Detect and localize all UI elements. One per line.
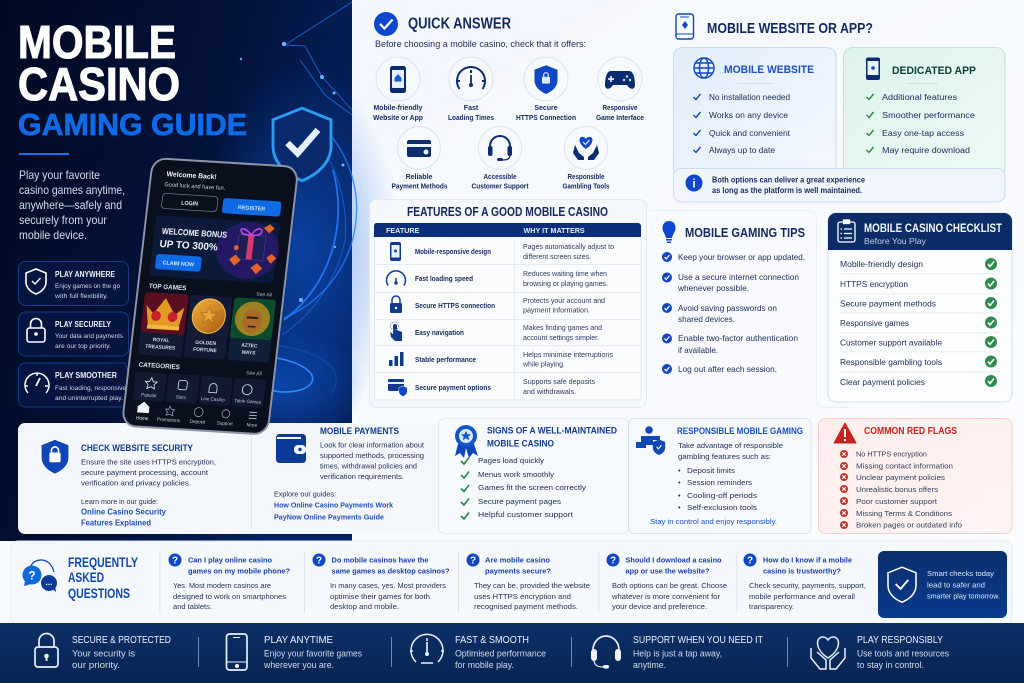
responsible copy: •	[678, 466, 681, 475]
faq: payments secure: Are mobile casino	[485, 556, 550, 564]
card: dedicated app: Additional features	[882, 93, 957, 102]
footer: play anytime: PLAY ANYTIME	[264, 634, 333, 646]
faq: can i play: and tablets.	[173, 604, 212, 611]
payments copy	[274, 440, 424, 498]
responsible copy: Cooling-off periods	[687, 491, 757, 500]
item: responsive game interface: Responsive	[602, 105, 638, 112]
footer: secure and protected	[35, 634, 171, 670]
phone welcome banner	[149, 215, 282, 284]
row: mobile-responsive: Mobile-responsive design	[415, 247, 491, 256]
payments links: PayNow Online Payments Guide	[274, 512, 384, 522]
card: mobile website: No installation needed	[709, 93, 790, 102]
responsible copy: Session reminders	[687, 478, 752, 487]
icon: clipboard	[838, 220, 855, 242]
row: stable performance: Helps minimise interruptions	[523, 350, 613, 359]
phone categories: Table Games	[234, 398, 262, 405]
accent rule	[19, 153, 69, 155]
tip text: Enable two-factor authentication	[678, 334, 798, 343]
card: mobile website	[674, 48, 836, 178]
faq: trustworthy: transparency.	[749, 604, 794, 611]
phone greeting: Welcome Back!	[166, 171, 217, 181]
game: aztec ways: WAYS	[241, 350, 256, 357]
row: mobile-responsive: Pages automatically adjust to	[523, 242, 614, 251]
feature card: play securely: are our top priority.	[55, 343, 111, 350]
table header: FEATURE	[386, 226, 420, 235]
checklist header	[828, 213, 1012, 250]
feature card: play securely: Your data and payments	[55, 333, 124, 340]
icon: chat bubbles: ...	[46, 578, 52, 587]
responsible copy: Take advantage of responsible	[678, 441, 783, 450]
icon: person with shield	[636, 426, 665, 455]
faq: can i play: games on my mobile phone?	[188, 566, 290, 576]
tip text: Avoid saving passwords on	[678, 304, 777, 313]
card: dedicated app: Smoother performance	[882, 111, 976, 120]
signs list: Secure payment pages	[478, 497, 561, 506]
intro text: mobile device.	[19, 228, 87, 242]
security copy: secure payment processing, account	[81, 468, 208, 477]
icon: medal	[455, 425, 478, 458]
callout: smart checks: lead to safer and	[927, 580, 985, 590]
feature card: play securely: PLAY SECURELY	[55, 320, 112, 329]
panel: signs of a well-maintained mobile casino	[438, 418, 628, 534]
item: reliable payment methods: Payment Methods	[392, 184, 448, 190]
tip text: shared devices.	[678, 315, 735, 324]
footer: fast and smooth: for mobile play.	[455, 660, 514, 670]
heading: features: FEATURES OF A GOOD MOBILE CASINO	[407, 205, 608, 219]
red flag list: Broken pages or outdated info	[856, 520, 962, 530]
security copy	[81, 458, 216, 506]
responsible copy: •	[678, 503, 681, 512]
phone register button: REGISTER	[238, 205, 266, 213]
panel: responsible mobile gaming	[628, 418, 811, 534]
faq: download	[606, 554, 727, 611]
icon: hero shield	[273, 108, 331, 181]
security copy: Ensure the site uses HTTPS encryption,	[81, 458, 216, 466]
faq: same games: In many cases, yes. Most providers	[330, 583, 447, 590]
faq: can i play	[168, 554, 290, 611]
item: responsible gambling tools: Responsible	[568, 174, 605, 181]
faq: can i play: Can I play online casino	[188, 556, 272, 564]
responsible copy: Deposit limits	[687, 466, 735, 475]
footer: play anytime: wherever you are.	[263, 660, 334, 670]
quick answer intro: Before choosing a mobile casino, check that it offers:	[375, 39, 586, 49]
phone bottom navigation: More	[246, 422, 258, 428]
faq: payments secure: They can be, provided the website	[474, 583, 590, 590]
tip text: Use a secure internet connection	[678, 273, 799, 282]
row: easy navigation	[390, 322, 602, 342]
panel: quick answer	[373, 12, 644, 190]
card: mobile website: Always up to date	[709, 146, 776, 155]
card: dedicated app	[844, 48, 1005, 178]
phone register button	[222, 198, 282, 217]
red flag list: Missing Terms & Conditions	[856, 509, 952, 518]
tip text: if available.	[678, 346, 718, 355]
payments links	[274, 500, 394, 522]
callout: smart checks: smarter play tomorrow.	[927, 592, 1000, 600]
panel: common red flags	[818, 418, 1012, 534]
checklist items: Mobile-friendly design	[840, 260, 923, 269]
responsible copy: Self-exclusion tools	[687, 503, 757, 512]
signs list: Helpful customer support	[478, 510, 574, 519]
checklist items: Customer support available	[840, 338, 943, 348]
faq: download: Both options can be great. Choose	[612, 583, 727, 590]
phone categories	[133, 361, 267, 408]
row: mobile-responsive: different screen sizes.	[523, 252, 591, 261]
item: fast loading: Loading Times	[448, 115, 494, 122]
panel: check website security and mobile payments	[18, 423, 440, 534]
note: both options: Both options can deliver a great experience	[712, 176, 866, 184]
table	[374, 223, 641, 400]
phone bottom navigation: Support	[216, 420, 234, 426]
phone bottom navigation: Promotions	[157, 417, 181, 423]
closing line: Stay in control and enjoy responsibly.	[650, 517, 777, 526]
icon: check badge	[374, 12, 398, 36]
phone bottom navigation: Deposit	[190, 419, 206, 425]
footer: support: anytime.	[633, 660, 666, 670]
heading: mobile payments: MOBILE PAYMENTS	[320, 426, 399, 437]
row: easy navigation: Easy navigation	[415, 328, 464, 337]
note: both options: as long as the platform is well maintained.	[712, 186, 862, 195]
checklist items: Responsible gambling tools	[840, 358, 942, 367]
row: secure https	[390, 296, 605, 314]
icon: shield	[26, 269, 46, 294]
faq: same games: optimise their games for both	[330, 594, 430, 601]
checklist items: HTTPS encryption	[840, 280, 908, 289]
guide links: Online Casino Security	[81, 508, 167, 516]
heading: signs: SIGNS OF A WELL-MAINTAINED	[487, 426, 617, 436]
row: secure payment options: and withdrawals.	[523, 387, 576, 396]
card: dedicated app: Easy one-tap access	[882, 129, 964, 138]
heading: signs	[487, 426, 617, 450]
payments links: How Online Casino Payments Work	[274, 500, 394, 510]
footer: play responsibly: Use tools and resources	[857, 648, 950, 658]
phone login button	[161, 193, 218, 212]
guide links: Features Explained	[81, 518, 151, 528]
row: stable performance: while playing.	[522, 360, 565, 368]
faq: payments secure: recognised payment methods.	[474, 604, 578, 611]
faq: download: app or use the website?	[626, 566, 710, 576]
responsible copy	[678, 441, 783, 512]
checklist marks	[985, 258, 997, 387]
checklist items: Responsive games	[840, 319, 909, 328]
row: secure payment options: Supports safe deposits	[523, 377, 595, 386]
row: fast loading speed: browsing or playing games.	[523, 279, 608, 288]
row: secure https: Protects your account and	[523, 296, 605, 305]
payments copy: verification requirements.	[320, 472, 404, 481]
icon: wallet	[276, 434, 306, 463]
item: secure https: Secure	[534, 105, 558, 112]
heading: faq: FREQUENTLY	[68, 554, 138, 570]
icon: blue shield lock	[41, 439, 69, 474]
red flag list: No HTTPS encryption	[856, 450, 927, 458]
payments copy: Explore our guides:	[274, 492, 336, 498]
phone welcome banner: UP TO 300%	[159, 239, 218, 254]
feature card: play smoother	[18, 363, 133, 407]
faq: can i play: Yes. Most modern casinos are	[173, 583, 271, 590]
row: easy navigation: Makes finding games and	[523, 323, 602, 332]
game: golden fortune	[184, 295, 232, 360]
game: aztec ways	[227, 297, 276, 363]
red flag list: Missing contact information	[856, 462, 953, 470]
phone login button: LOGIN	[181, 200, 198, 208]
card: dedicated app: DEDICATED APP	[892, 65, 976, 77]
footer: fast and smooth: FAST & SMOOTH	[455, 634, 529, 646]
red flag list	[856, 450, 962, 530]
title: GAMING GUIDE	[18, 107, 247, 142]
title: CASINO	[18, 58, 180, 110]
responsible copy: gambling features such as:	[678, 452, 771, 461]
security copy: Learn more in our guide:	[81, 499, 158, 506]
phone categories: Slots	[176, 394, 187, 400]
heading: faq	[68, 554, 138, 601]
red flag list: Poor customer support	[856, 497, 938, 506]
phone mockup	[121, 157, 299, 436]
icon: phone filled	[866, 58, 880, 80]
phone top games heading	[148, 283, 273, 299]
table header	[374, 223, 641, 237]
callout: smart checks	[878, 551, 1007, 618]
faq: payments secure: payments secure?	[485, 566, 551, 576]
phone greeting	[164, 171, 227, 192]
payments copy: Look for clear information about	[320, 440, 424, 450]
item: mobile-friendly: Website or App	[373, 115, 423, 122]
heading: faq: QUESTIONS	[68, 585, 130, 601]
responsible copy: •	[678, 478, 681, 487]
heading: red flags: COMMON RED FLAGS	[864, 426, 957, 437]
heading: faq: ASKED	[68, 569, 104, 585]
responsible copy: •	[678, 491, 681, 500]
icon: gauge	[25, 373, 49, 393]
faq: download: your device and preference.	[612, 604, 707, 611]
panel: mobile casino checklist	[828, 213, 1012, 402]
item: secure https: HTTPS Connection	[516, 115, 576, 122]
game: golden fortune: GOLDEN	[195, 340, 217, 347]
security copy: verification and privacy policies.	[81, 478, 191, 488]
row: stable performance	[389, 350, 613, 368]
footer: fast and smooth: Optimised performance	[455, 648, 546, 658]
feature card: play smoother: and uninterrupted play.	[55, 395, 123, 402]
footer: fast and smooth	[410, 634, 546, 670]
tip text: whenever possible.	[677, 284, 749, 293]
heading: mobile gaming tips: MOBILE GAMING TIPS	[685, 225, 805, 240]
panel: hero dark background	[0, 0, 400, 541]
icon: outline shield	[888, 567, 916, 602]
icon: chat bubbles: ?	[28, 570, 36, 582]
footer: secure and protected: SECURE & PROTECTED	[72, 634, 171, 646]
icon: lock	[27, 318, 45, 342]
row: secure https: payment information.	[523, 306, 590, 314]
tip checks	[662, 252, 672, 374]
item: mobile-friendly	[373, 57, 423, 122]
heading: signs: MOBILE CASINO	[487, 438, 554, 450]
footer: secure and protected: our priority.	[72, 660, 120, 670]
item: responsive game interface: Game Interface	[596, 115, 644, 122]
checklist items: Clear payment policies	[840, 378, 925, 387]
footer: secure and protected: Your security is	[72, 648, 136, 658]
card: mobile website: Quick and convenient	[709, 129, 791, 138]
faq: download: Should I download a casino	[626, 556, 722, 564]
row: fast loading speed: Fast loading speed	[415, 274, 473, 283]
card: mobile website: Works on any device	[709, 111, 789, 120]
footer: play responsibly	[811, 634, 950, 670]
card: mobile website: MOBILE WEBSITE	[724, 64, 814, 76]
intro text: anywhere—safely and	[19, 198, 122, 212]
row: fast loading speed	[386, 269, 608, 288]
feature card: play anywhere: with full flexibility.	[54, 293, 108, 300]
faq: payments secure	[466, 554, 590, 611]
payments copy: supported methods, processing	[320, 451, 424, 460]
faq: can i play: designed to work on smartphones	[173, 594, 287, 601]
item: fast loading: Fast	[464, 105, 479, 112]
footer band	[0, 623, 1024, 683]
row: secure payment options: Secure payment options	[415, 383, 491, 392]
phone bottom navigation	[136, 401, 259, 428]
heading: mobile website or app: MOBILE WEBSITE OR APP?	[707, 20, 873, 37]
phone top games heading: TOP GAMES	[148, 283, 187, 292]
row: secure https: Secure HTTPS connection	[415, 301, 495, 310]
icon: chat bubbles	[22, 560, 57, 592]
signs list: Pages load quickly	[478, 456, 544, 465]
guide links	[81, 508, 167, 528]
callout: smart checks: Smart checks today	[927, 569, 994, 578]
note: both options: i	[692, 176, 696, 190]
note: both options	[674, 168, 1005, 202]
heading: quick answer: QUICK ANSWER	[408, 16, 511, 32]
faq: same games: Do mobile casinos have the	[332, 556, 428, 564]
item: accessible customer support	[472, 126, 529, 190]
faq: trustworthy: How do I know if a mobile	[763, 556, 852, 564]
feature card: play anywhere	[18, 262, 128, 306]
icon: gems	[228, 222, 280, 275]
row: fast loading speed: Reduces waiting time when	[523, 269, 607, 278]
checklist header: Before You Play	[864, 236, 927, 246]
footer: support: Help is just a tap away,	[633, 648, 722, 658]
feature card: play anywhere: PLAY ANYWHERE	[55, 270, 116, 279]
phone categories: Live Casino	[201, 396, 225, 403]
phone categories: See All	[246, 370, 262, 377]
signs list	[461, 456, 586, 519]
panel: mobile gaming tips	[650, 210, 850, 408]
item: accessible customer support: Accessible	[484, 174, 517, 181]
title	[18, 16, 247, 142]
circuit lines and glow arcs	[240, 2, 357, 395]
game: royal treasures: TREASURES	[145, 344, 176, 352]
phone welcome banner: WELCOME BONUS	[161, 226, 228, 240]
faq: trustworthy	[744, 554, 866, 611]
item: fast loading	[448, 57, 494, 122]
game: royal treasures	[138, 292, 189, 357]
item: mobile-friendly: Mobile-friendly	[374, 105, 423, 112]
item: reliable payment methods	[392, 126, 448, 190]
phone bottom navigation: Home	[136, 415, 149, 421]
item: accessible customer support: Customer Support	[472, 184, 529, 190]
tip text	[677, 253, 805, 374]
tip text: Keep your browser or app updated.	[678, 253, 805, 262]
feature card: play anywhere: Enjoy games on the go	[55, 283, 120, 290]
item: secure https	[516, 57, 576, 122]
item: responsible gambling tools: Gambling Tools	[562, 184, 610, 190]
icon: phone outline	[676, 14, 694, 39]
intro text: securely from your	[19, 213, 107, 227]
title: MOBILE	[18, 16, 176, 68]
checklist header: MOBILE CASINO CHECKLIST	[864, 223, 1002, 235]
intro text: Play your favorite	[19, 168, 100, 182]
item: responsible gambling tools	[562, 126, 610, 190]
game: golden fortune: FORTUNE	[193, 347, 218, 354]
panel: frequently asked questions	[11, 541, 1012, 625]
faq: payments secure: uses HTTPS encryption and	[474, 594, 571, 601]
icon: warning triangle	[834, 423, 856, 443]
phone top games heading: See All	[256, 292, 272, 299]
faq: same games	[312, 554, 450, 611]
phone categories: Popular	[141, 392, 157, 398]
footer: play anytime: Enjoy your favorite games	[264, 648, 363, 658]
red flag marks	[840, 450, 848, 529]
heading: check website security: CHECK WEBSITE SECURITY	[81, 443, 194, 454]
signs list: Menus work smoothly	[478, 470, 554, 479]
icon: gift box	[236, 228, 267, 260]
footer: play responsibly: PLAY RESPONSIBLY	[857, 634, 943, 646]
feature card: play securely	[18, 312, 128, 356]
red flag list: Unclear payment policies	[856, 473, 945, 482]
footer: support	[591, 634, 763, 670]
game: aztec ways: AZTEC	[241, 343, 258, 350]
item: reliable payment methods: Reliable	[406, 174, 433, 181]
phone welcome banner: CLAIM NOW	[162, 260, 195, 268]
red flag list: Unrealistic bonus offers	[856, 485, 938, 494]
faq: trustworthy: mobile performance and overall	[749, 594, 855, 601]
faq: trustworthy: Check security, payments, support,	[749, 583, 866, 590]
faq: download: whatever is more convenient for	[611, 594, 721, 601]
game: royal treasures: ROYAL	[152, 337, 170, 344]
phone greeting: Good luck and have fun.	[164, 182, 226, 192]
phone categories: CATEGORIES	[138, 362, 181, 371]
item: responsive game interface	[596, 57, 644, 122]
row: mobile-responsive	[390, 242, 614, 261]
panel: mobile website or app	[674, 14, 1005, 202]
faq: same games: desktop and mobile.	[330, 604, 399, 611]
row: secure payment options	[388, 377, 595, 396]
footer: play anytime	[226, 634, 363, 670]
footer: play responsibly: to stay in control.	[857, 660, 924, 670]
feature card: play smoother: Fast loading, responsive	[55, 385, 126, 392]
row: easy navigation: account settings simpler.	[523, 333, 599, 342]
footer: support: SUPPORT WHEN YOU NEED IT	[633, 634, 763, 646]
table header: WHY IT MATTERS	[524, 226, 585, 235]
signs list: Games fit the screen correctly	[478, 483, 586, 492]
faq: same games: same games as desktop casinos?	[332, 566, 450, 576]
tip text: Log out after each session.	[678, 365, 777, 374]
intro text	[19, 168, 125, 242]
feature card: play smoother: PLAY SMOOTHER	[55, 371, 117, 380]
payments copy: times, withdrawal policies and	[320, 462, 417, 470]
icon: globe	[694, 58, 714, 78]
heading: responsible gaming: RESPONSIBLE MOBILE GAMING	[677, 426, 803, 436]
icon: light bulb	[662, 221, 676, 243]
checklist items	[840, 260, 943, 387]
panel: features of a good mobile casino	[370, 200, 646, 408]
intro text: casino games anytime,	[19, 183, 125, 197]
card: dedicated app: May require download	[882, 146, 970, 155]
checklist items: Secure payment methods	[840, 300, 936, 308]
row: stable performance: Stable performance	[415, 355, 476, 364]
faq: trustworthy: casino is trustworthy?	[763, 566, 841, 576]
